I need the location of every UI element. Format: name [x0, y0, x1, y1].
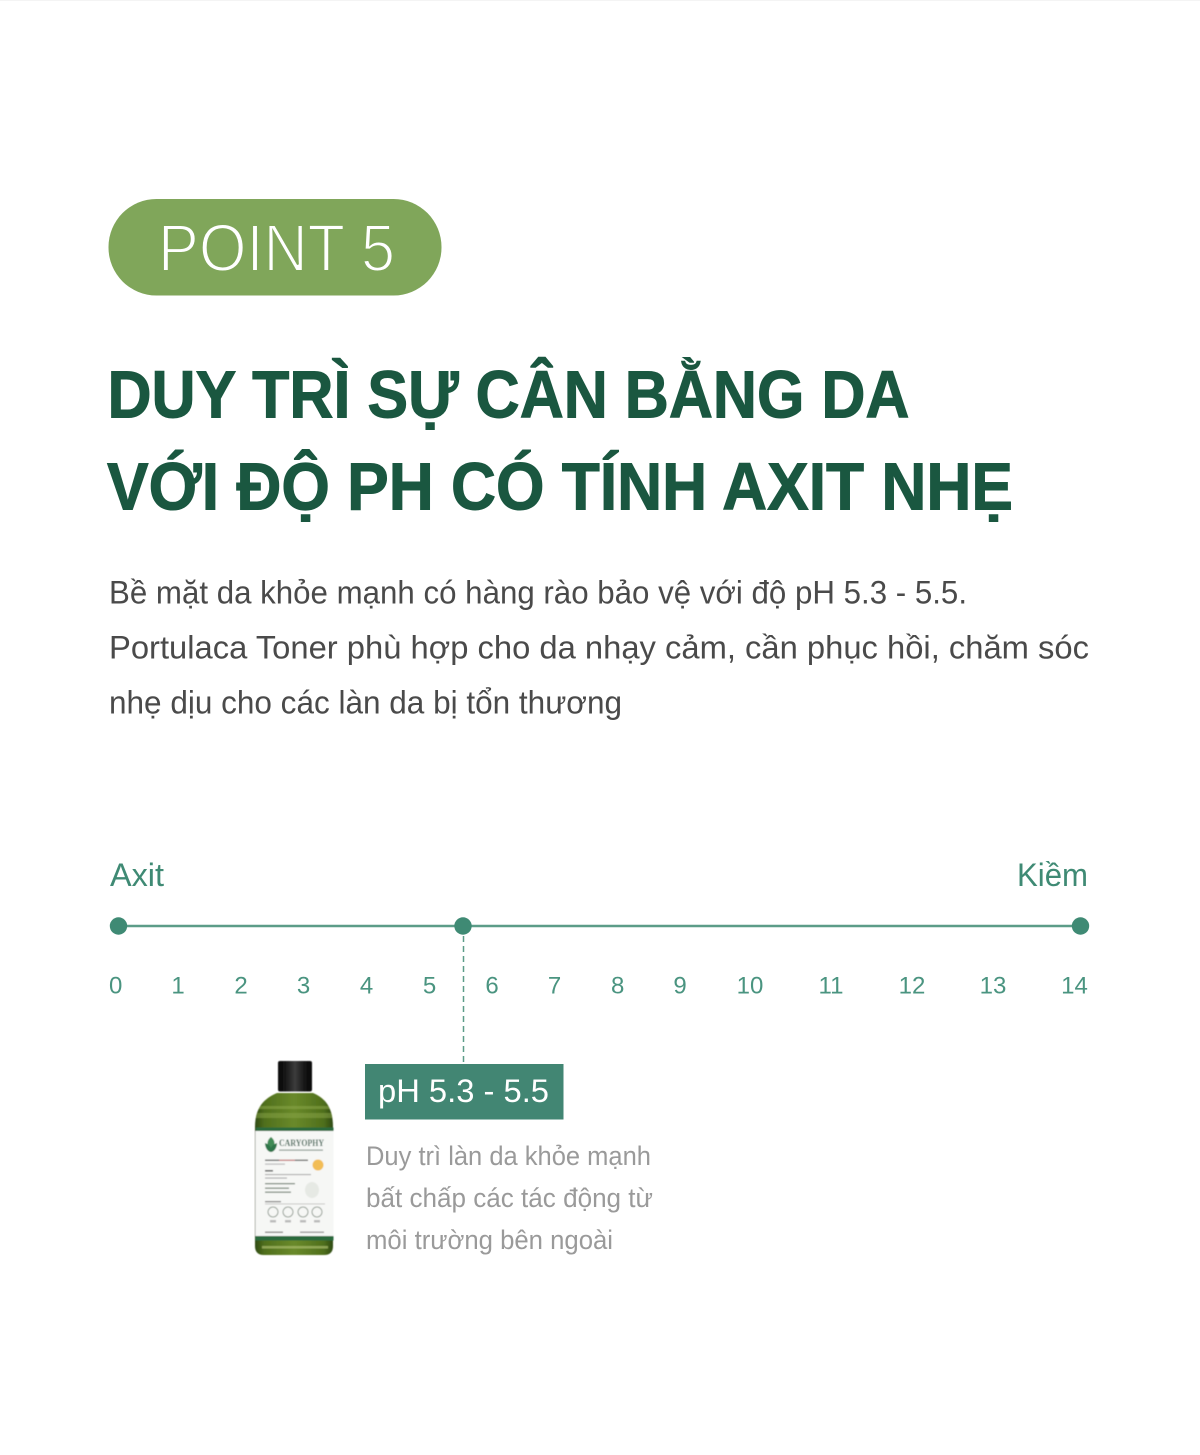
badge: POINT 5	[108, 199, 442, 296]
scale numbers: 1	[171, 972, 185, 1000]
caption text: bất chấp các tác động từ	[366, 1183, 653, 1213]
scale numbers: 3	[297, 972, 310, 1000]
scale numbers: 4	[360, 972, 373, 1000]
label: Kiềm: Kiềm	[1017, 857, 1088, 893]
description text	[109, 574, 1089, 720]
scale numbers: 8	[611, 972, 624, 1000]
caption text: Duy trì làn da khỏe mạnh	[366, 1141, 651, 1171]
description text: Portulaca Toner phù hợp cho da nhạy cảm, cần phục hồi, chăm sóc	[109, 630, 1089, 666]
scale numbers: 6	[485, 972, 499, 1000]
scale numbers: 13	[980, 972, 1006, 1000]
caption text: môi trường bên ngoài	[366, 1225, 613, 1255]
pH value tag: pH 5.3 - 5.5	[378, 1073, 549, 1109]
heading: DUY TRÌ SỰ CÂN BẰNG DA	[108, 358, 910, 432]
caption text	[366, 1141, 653, 1255]
heading	[107, 358, 1013, 524]
scale numbers: 10	[737, 972, 763, 1000]
pH scale chart	[109, 857, 1089, 1063]
scale numbers	[109, 972, 1088, 1000]
pH value tag	[365, 1064, 564, 1120]
scale line with markers	[110, 917, 1089, 935]
dashed connector	[462, 936, 464, 1063]
scale numbers: 11	[819, 972, 843, 1000]
label: Axit: Axit	[110, 857, 164, 893]
badge: POINT 5: POINT 5	[158, 211, 395, 286]
scale numbers: 2	[234, 972, 248, 1000]
scale numbers: 7	[548, 972, 561, 1000]
heading: VỚI ĐỘ PH CÓ TÍNH AXIT NHẸ	[107, 450, 1013, 524]
scale numbers: 12	[899, 972, 925, 1000]
scale numbers: 9	[673, 972, 687, 1000]
scale numbers: 14	[1061, 972, 1088, 1000]
description text: Bề mặt da khỏe mạnh có hàng rào bảo vệ với độ pH 5.3 - 5.5.	[109, 574, 967, 610]
description text: nhẹ dịu cho các làn da bị tổn thương	[109, 684, 622, 720]
scale numbers: 0	[109, 972, 122, 1000]
scale numbers: 5	[423, 972, 436, 1000]
icon: toner bottle: CARYOPHY	[279, 1139, 324, 1149]
icon: toner bottle	[255, 1061, 335, 1255]
